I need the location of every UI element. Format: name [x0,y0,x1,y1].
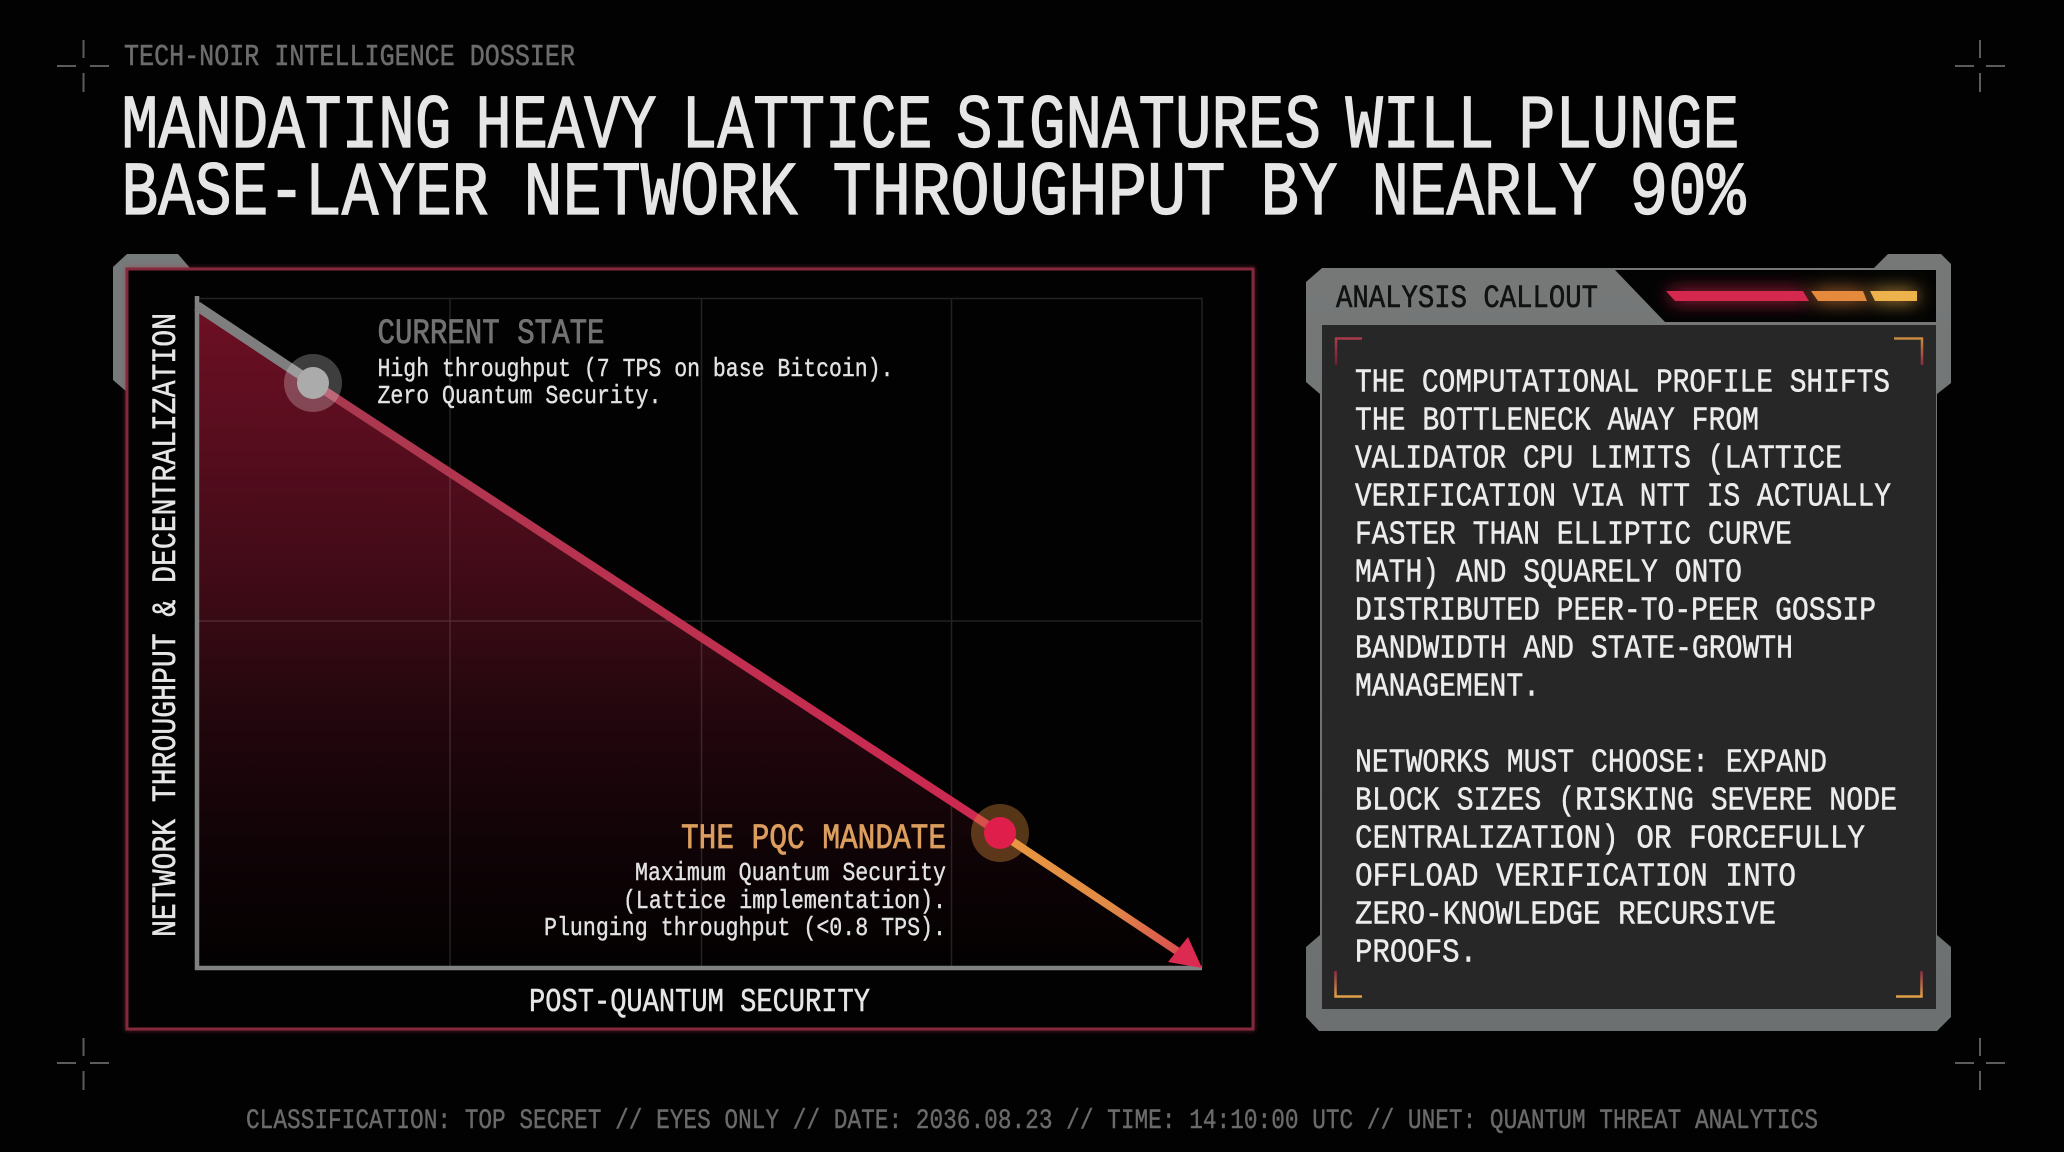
title: WILL [1346,84,1494,170]
annotation: current state: CURRENT STATE [378,314,604,354]
callout status display [1615,270,1936,322]
chart frame [127,269,1253,1029]
callout paragraph one [1355,364,1891,706]
title: NETWORK [524,151,798,237]
callout paragraph two: PROOFS. [1355,934,1477,972]
title: SIGNATURES [956,84,1321,170]
callout paragraph two: OFFLOAD VERIFICATION INTO [1355,858,1796,896]
title: 90% [1630,151,1746,237]
annotation: PQC mandate: Maximum Quantum Security [635,858,946,888]
annotation: current state: High throughput (7 TPS on base Bitcoin). [378,354,894,384]
title: THROUGHPUT [832,151,1226,237]
callout paragraph one: DISTRIBUTED PEER-TO-PEER GOSSIP [1355,592,1876,630]
callout paragraph one: VERIFICATION VIA NTT IS ACTUALLY [1355,478,1891,516]
title: BASE-LAYER [122,151,488,237]
callout paragraph one: FASTER THAN ELLIPTIC CURVE [1355,516,1792,554]
panel: analysis callout [1306,254,1951,1031]
title: LATTICE [682,84,932,170]
callout corner brackets [1336,338,1922,996]
y axis label: NETWORK THROUGHPUT & DECENTRALIZATION [148,313,186,937]
arrowhead [1168,937,1202,968]
callout paragraph two [1355,744,1897,972]
callout paragraph one: THE COMPUTATIONAL PROFILE SHIFTS [1355,364,1890,402]
annotation: PQC mandate [544,819,946,943]
callout paragraph one: THE BOTTLENECK AWAY FROM [1355,402,1759,440]
callout paragraph one: MANAGEMENT. [1355,668,1540,706]
callout paragraph two: ZERO-KNOWLEDGE RECURSIVE [1355,896,1776,934]
title: BY [1260,151,1338,237]
x axis label: POST-QUANTUM SECURITY [529,984,870,1021]
status bars [1666,291,1917,301]
panel: throughput chart [113,254,1253,1029]
marker: current state [284,354,342,412]
annotation: PQC mandate: (Lattice implementation). [623,886,946,916]
shaded area under the line [199,309,1202,968]
callout paragraph one: VALIDATOR CPU LIMITS (LATTICE [1355,440,1842,478]
chart axes [197,296,1202,968]
marker: PQC mandate [971,804,1029,862]
trend line crimson segment [313,383,1000,833]
annotation: current state [378,314,894,411]
title: HEAVY [476,84,656,170]
callout paragraph one: MATH) AND SQUARELY ONTO [1355,554,1742,592]
callout paragraph two: BLOCK SIZES (RISKING SEVERE NODE [1355,782,1897,820]
title: PLUNGE [1518,84,1740,170]
callout body panel [1322,325,1936,1009]
callout metal frame [1306,254,1951,1031]
chart grid [197,298,1202,968]
annotation: PQC mandate: Plunging throughput (<0.8 TPS). [544,913,946,943]
trend line grey segment [197,306,313,383]
eyebrow label: TECH-NOIR INTELLIGENCE DOSSIER [124,40,575,75]
callout paragraph two: NETWORKS MUST CHOOSE: EXPAND [1355,744,1827,782]
title: NEARLY [1372,151,1596,237]
annotation: PQC mandate: THE PQC MANDATE [681,819,946,859]
status bars glow [1666,291,1917,301]
trend line orange segment [1000,833,1186,957]
callout paragraph two: CENTRALIZATION) OR FORCEFULLY [1355,820,1865,858]
annotation: current state: Zero Quantum Security. [378,381,662,411]
callout heading: ANALYSIS CALLOUT [1336,280,1598,317]
title [122,84,1746,237]
title: MANDATING [122,84,452,170]
chart corner bracket [113,254,190,392]
callout paragraph one: BANDWIDTH AND STATE-GROWTH [1355,630,1793,668]
